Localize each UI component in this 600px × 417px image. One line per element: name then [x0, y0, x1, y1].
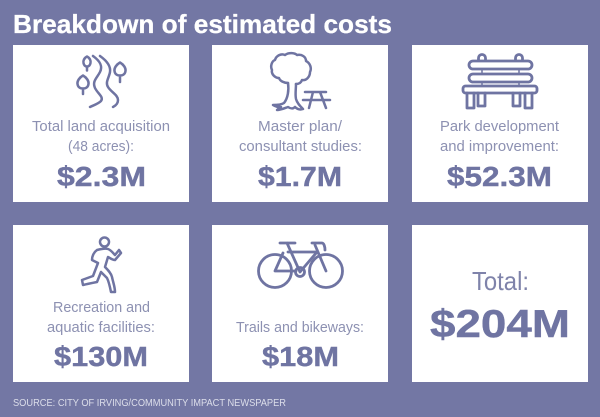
panel: park development	[412, 45, 588, 202]
icon: trees and winding paths	[77, 56, 126, 107]
label: recreation and: Recreation and	[53, 300, 150, 316]
label: aquatic facilities: aquatic facilities:	[47, 320, 155, 336]
value: $52.3M: $52.3M	[447, 161, 552, 192]
label: and improvement: and improvement:	[440, 139, 559, 155]
icon: park bench	[463, 55, 537, 108]
value: $1.7M: $1.7M	[258, 161, 342, 192]
label: total land acquisition: Total land acquisition	[32, 119, 170, 135]
label: park development: Park development	[440, 119, 559, 135]
value: $18M: $18M	[262, 341, 339, 372]
panel: trails	[212, 225, 388, 382]
value: $204M: $204M	[430, 303, 570, 346]
label: master plan: Master plan/	[258, 119, 343, 135]
label: 48 acres: (48 acres):	[68, 139, 134, 155]
panel: total	[412, 225, 588, 382]
value: $2.3M: $2.3M	[57, 161, 146, 192]
source note: SOURCE: CITY OF IRVING/COMMUNITY IMPACT NEWSPAPER	[13, 398, 286, 409]
panel: master plan	[212, 45, 388, 202]
icon: runner	[82, 238, 121, 292]
value: $130M: $130M	[54, 341, 148, 372]
title: Breakdown of estimated costs	[13, 9, 392, 39]
label: total: Total:	[472, 266, 529, 296]
icon: bicycle	[258, 243, 342, 288]
icon: tree and picnic table	[271, 53, 330, 110]
panel: recreation	[13, 225, 189, 382]
panel: land acquisition	[13, 45, 189, 202]
label: trails and bikeways: Trails and bikeways:	[236, 320, 364, 336]
label: consultant studies: consultant studies:	[239, 139, 362, 155]
